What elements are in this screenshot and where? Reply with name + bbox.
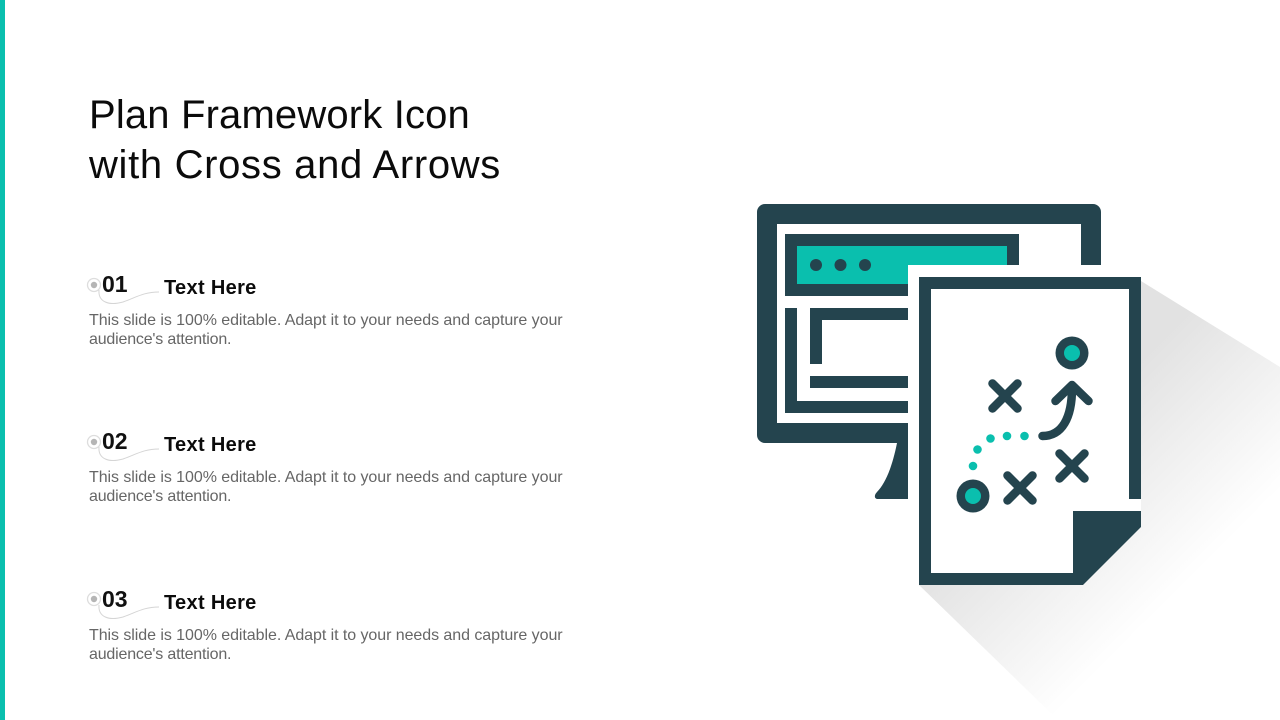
number 02: 02 (102, 428, 128, 454)
item 01 (86, 271, 563, 348)
window content lines (785, 308, 908, 413)
number 03: 03 (102, 586, 128, 612)
document (908, 265, 1141, 585)
cross marks (992, 384, 1084, 500)
icon: node and curve 03 (86, 592, 159, 619)
accent bar (0, 0, 5, 720)
arrow (1042, 385, 1088, 436)
body text 03 (89, 627, 563, 663)
play diagram (956, 336, 1088, 512)
target circle (1056, 336, 1088, 370)
body text 02: audience's attention. (89, 488, 231, 505)
heading 01: Text Here (164, 277, 257, 299)
icon: node and curve 02 (86, 435, 159, 461)
browser header bar (785, 234, 1019, 296)
number 01: 01 (102, 271, 128, 297)
heading 03: Text Here (164, 592, 257, 614)
item 03 (86, 586, 563, 663)
icon: node and curve 01 (86, 278, 159, 304)
monitor (757, 204, 1101, 499)
body text 03: audience's attention. (89, 646, 231, 663)
body text 02: This slide is 100% editable. Adapt it to your needs and capture your (89, 469, 563, 486)
body text 03: This slide is 100% editable. Adapt it to your needs and capture your (89, 627, 563, 644)
title: with Cross and Arrows (89, 143, 501, 187)
body text 02 (89, 469, 563, 505)
item 02 (86, 428, 563, 505)
body text 01: This slide is 100% editable. Adapt it to your needs and capture your (89, 312, 563, 329)
start circle (956, 480, 990, 512)
body text 01 (89, 312, 563, 348)
body text 01: audience's attention. (89, 331, 231, 348)
long shadow (919, 281, 1280, 720)
heading 02: Text Here (164, 434, 257, 456)
dotted path (969, 432, 1029, 470)
title: Plan Framework Icon (89, 93, 470, 137)
title (89, 93, 501, 187)
